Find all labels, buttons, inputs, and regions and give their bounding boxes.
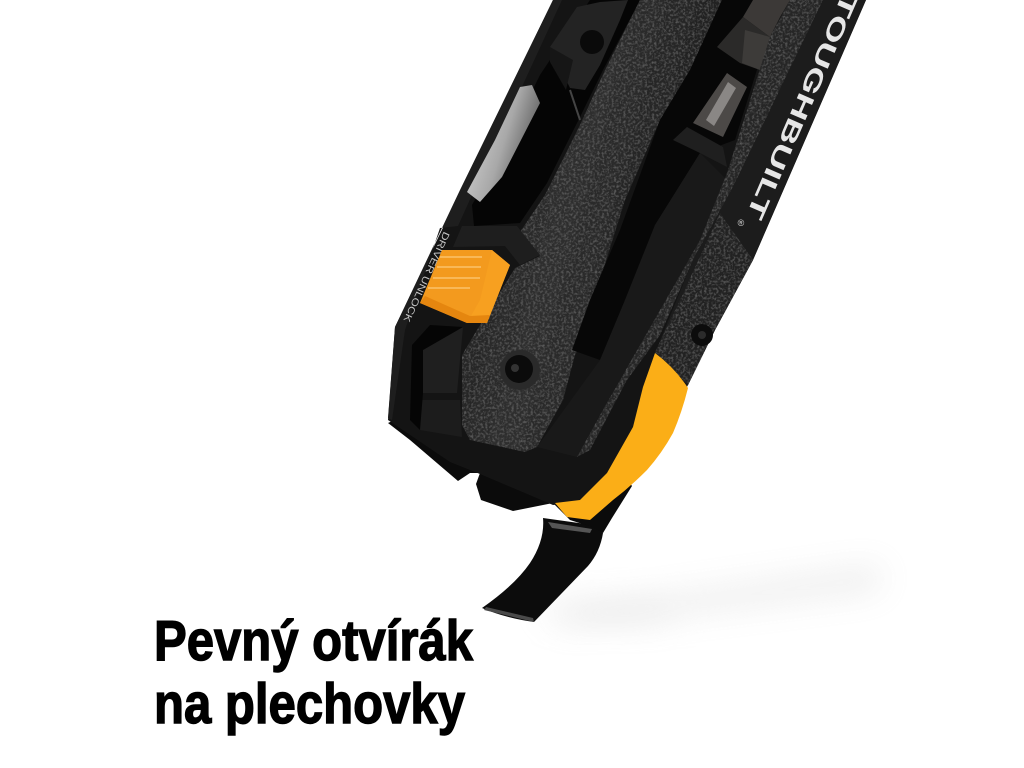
lower jaws (388, 400, 632, 533)
floor shadow (540, 565, 880, 622)
button shelf (453, 226, 540, 265)
registered mark: ® (738, 218, 745, 228)
label strip (655, 0, 866, 385)
unlock label: DRIVER UNLOCK (400, 230, 451, 324)
lower black block (410, 325, 463, 437)
product photo: multitool (388, 0, 866, 622)
right textured band (577, 0, 823, 457)
lower right textured body (655, 213, 753, 385)
right cavity (572, 0, 770, 360)
heading line 1: Pevný otvírák (154, 609, 473, 673)
front torx screw (500, 350, 540, 390)
central textured ridge (462, 0, 722, 452)
orange unlock button (420, 250, 510, 323)
hex driver bit (673, 0, 790, 167)
yellow bumper (555, 353, 688, 520)
tool body silhouette (388, 0, 866, 505)
left cavity (472, 0, 640, 226)
can opener blade (482, 518, 603, 622)
silver screwdriver bit (467, 85, 540, 202)
left rim strip (388, 0, 562, 420)
black strap (537, 153, 727, 457)
heading line 2: na plechovky (154, 672, 465, 736)
heading (154, 609, 473, 736)
folded tool in cavity (550, 0, 628, 120)
side screw (691, 324, 713, 346)
